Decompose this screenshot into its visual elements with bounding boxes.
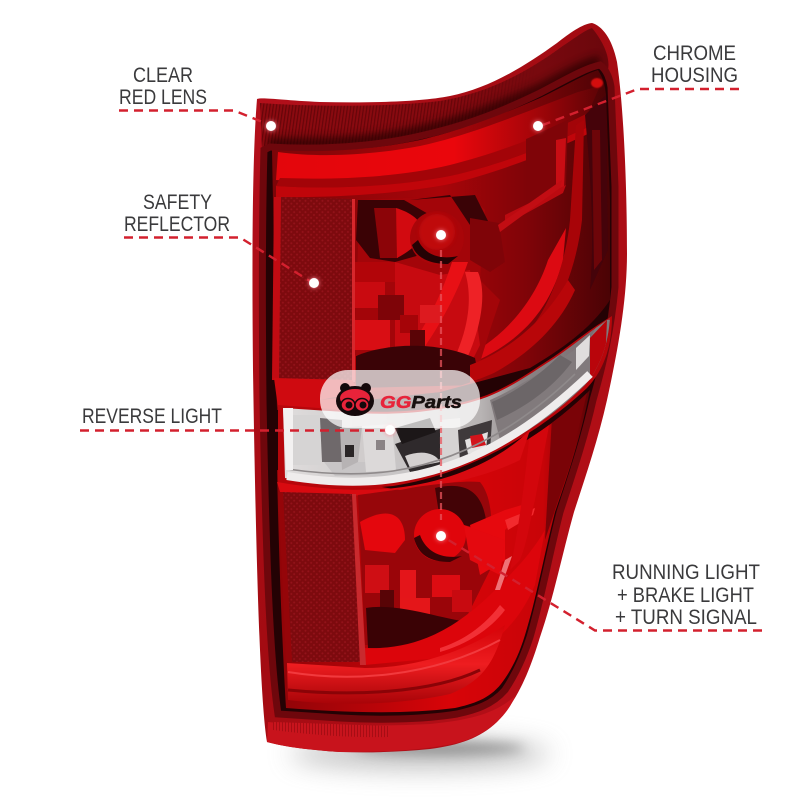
- label: clear red lens: CLEAR: [133, 64, 193, 87]
- marker dot: [385, 425, 395, 435]
- leader line: [124, 238, 313, 283]
- mid red divider: [274, 378, 360, 412]
- marker dot: [533, 121, 543, 131]
- marker dot: [266, 121, 276, 131]
- label: safety reflector: SAFETY: [143, 191, 212, 214]
- vertical link between bulbs: [440, 250, 442, 520]
- ground shadow: [290, 740, 550, 768]
- small corner highlight: [591, 78, 603, 88]
- upper ribbed band: [260, 33, 601, 150]
- leader line to lower bulb: [442, 536, 762, 630]
- shading under ribs: [268, 61, 600, 143]
- label: chrome housing: [651, 42, 738, 87]
- callout: chrome housing: [533, 42, 739, 131]
- inner dark gasket: [262, 65, 615, 719]
- marker dot: [309, 278, 319, 288]
- label: chrome housing: HOUSING: [651, 64, 738, 87]
- upper lens chamber: [272, 70, 610, 410]
- lower lens chamber: [277, 390, 590, 712]
- callout: clear red lens: [119, 64, 276, 131]
- lower lens chamber details: [358, 380, 590, 665]
- label: clear red lens: [119, 64, 207, 109]
- upper safety reflector: [272, 197, 355, 382]
- reverse light: [278, 310, 615, 490]
- label: safety reflector: REFLECTOR: [124, 213, 230, 236]
- marker dot upper bulb: [436, 230, 446, 240]
- icon: pig mascot: [336, 383, 374, 416]
- label: running, brake, turn: [612, 561, 760, 629]
- logo pill: [320, 370, 480, 428]
- label: reverse light: REVERSE LIGHT: [82, 405, 222, 428]
- upper reflections and ridges: [350, 95, 608, 395]
- leader line: [119, 110, 270, 125]
- label: running, brake, turn: + BRAKE LIGHT: [617, 584, 754, 607]
- label: chrome housing: CHROME: [653, 42, 736, 65]
- chrome bottom rim: [287, 374, 590, 482]
- label: running, brake, turn: RUNNING LIGHT: [612, 561, 760, 584]
- label: clear red lens: RED LENS: [119, 86, 207, 109]
- callout: reverse light: [80, 405, 395, 435]
- lower divider: [277, 430, 530, 496]
- watermark logo: [320, 370, 480, 428]
- label: running, brake, turn: + TURN SIGNAL: [615, 606, 757, 629]
- right fade on ribbed band: [260, 28, 608, 150]
- tail light assembly: [252, 23, 627, 752]
- outer red housing: [252, 23, 627, 752]
- upper bulb: [410, 211, 464, 265]
- lower bulb: [414, 509, 505, 575]
- label: safety reflector: [124, 191, 230, 236]
- marker dot lower bulb: [436, 531, 446, 541]
- logo wordmark: GGParts: [380, 392, 462, 412]
- callout: safety reflector: [124, 191, 319, 288]
- leader line: [540, 89, 739, 126]
- leader line: [80, 429, 388, 432]
- lower safety reflector: [278, 492, 366, 665]
- top chrome bright band: [276, 86, 600, 181]
- lower ribbed band: [267, 696, 515, 752]
- bottom red bands: [287, 625, 505, 704]
- callout: running light brake light turn signal: [436, 230, 762, 630]
